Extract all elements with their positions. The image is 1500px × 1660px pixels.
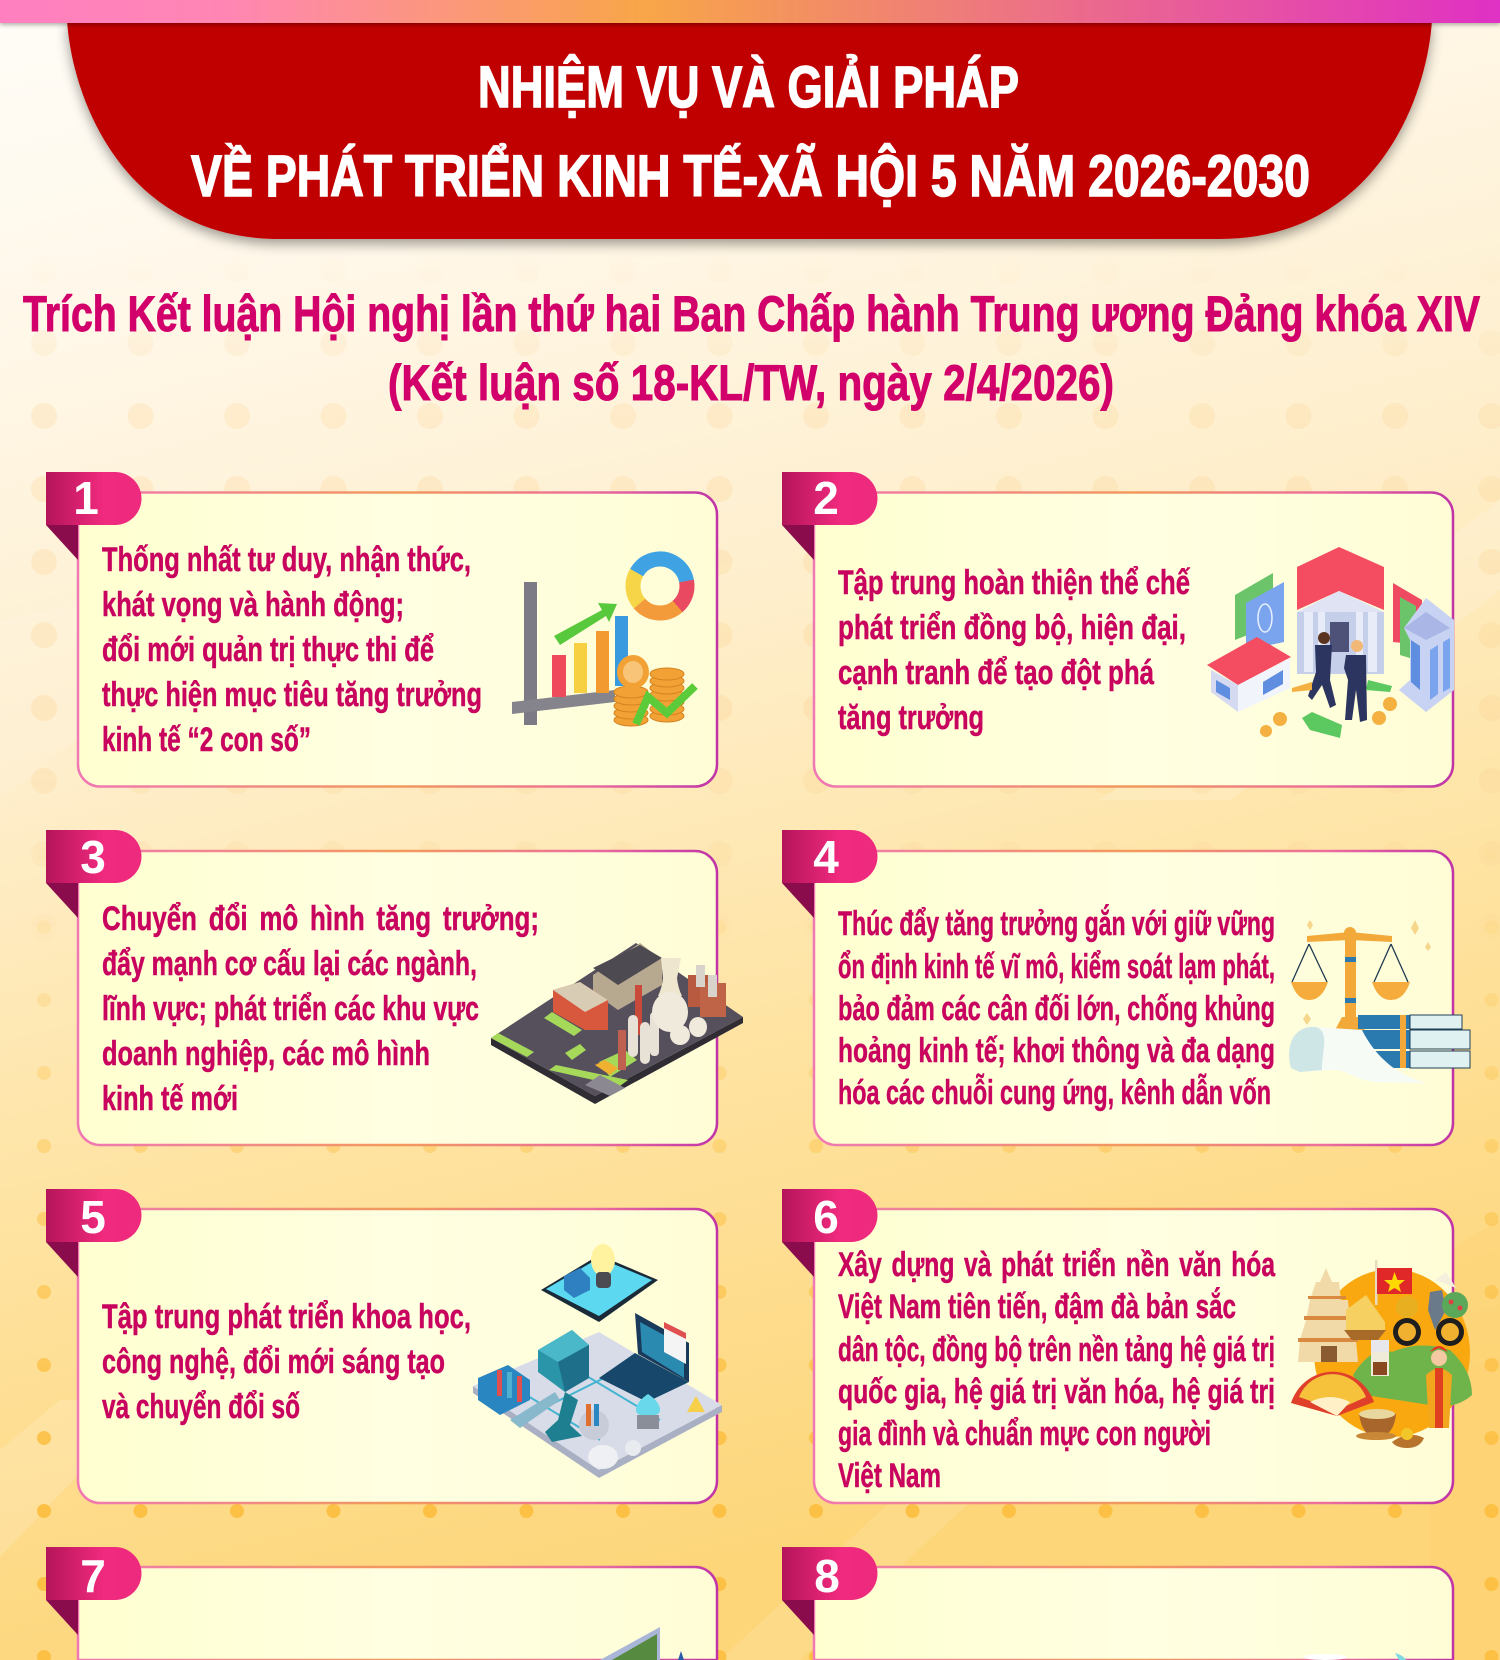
- text: item 2: tăng trưởng: [838, 699, 984, 737]
- text: item 6: dân tộc, đồng bộ trên nền tảng hệ giá trị: [838, 1331, 1275, 1369]
- icon: scales, books and scroll: [1289, 920, 1470, 1083]
- number badge 2: [782, 472, 878, 560]
- icon: growth chart with coins: [512, 548, 698, 726]
- text: item 1: [102, 541, 482, 759]
- icon: science and technology lab: [473, 1244, 722, 1478]
- text: item 3: doanh nghiệp, các mô hình: [102, 1035, 430, 1073]
- text: item 5: [102, 1298, 471, 1426]
- panel: item 6: [782, 1189, 1472, 1503]
- panel: item 8: [782, 1547, 1453, 1660]
- text: item 1: đổi mới quản trị thực thi để: [102, 631, 434, 669]
- number badge 4: 4: [813, 831, 839, 883]
- text: item 5: công nghệ, đổi mới sáng tạo: [102, 1343, 445, 1381]
- text: item 6: Xây dựng và phát triển nền văn hóa: [838, 1246, 1276, 1284]
- text: item 2: phát triển đồng bộ, hiện đại,: [838, 609, 1186, 647]
- icon: blackboard corner: [600, 1627, 684, 1660]
- text: item 1: thực hiện mục tiêu tăng trưởng: [102, 676, 482, 714]
- icon: isometric factory: [491, 943, 743, 1104]
- text: item 3: [102, 900, 539, 1118]
- number badge 7: [46, 1547, 142, 1635]
- text: item 2: cạnh tranh để tạo đột phá: [838, 654, 1154, 692]
- text: item 6: [838, 1246, 1276, 1495]
- icon: bank, house and business handshake: [1207, 547, 1454, 738]
- text: item 1: khát vọng và hành động;: [102, 586, 404, 624]
- number badge 7: 7: [80, 1550, 106, 1602]
- panel: item 3: [46, 830, 743, 1145]
- number badge 1: [46, 472, 142, 560]
- text: item 3: Chuyển đổi mô hình tăng trưởng;: [102, 900, 539, 938]
- number badge 2: 2: [813, 472, 839, 524]
- icon: top of illustration: [1303, 1653, 1406, 1660]
- text: item 3: lĩnh vực; phát triển các khu vực: [102, 990, 479, 1028]
- text: item 6: gia đình và chuẩn mực con người: [838, 1415, 1211, 1453]
- top gradient bar: [0, 0, 1500, 23]
- text: item 4: [838, 905, 1275, 1112]
- text: item 4: bảo đảm các cân đối lớn, chống khủng: [838, 990, 1275, 1028]
- number badge 6: 6: [813, 1191, 839, 1243]
- text: item 6: quốc gia, hệ giá trị văn hóa, hệ giá trị: [838, 1373, 1275, 1411]
- subtitle: [23, 286, 1480, 411]
- subtitle: (Kết luận số 18-KL/TW, ngày 2/4/2026): [388, 355, 1114, 411]
- number badge 3: 3: [80, 831, 106, 883]
- text: item 3: đẩy mạnh cơ cấu lại các ngành,: [102, 945, 477, 983]
- number badge 5: 5: [80, 1191, 106, 1243]
- number badge 4: [782, 830, 878, 918]
- number badge 3: [46, 830, 142, 918]
- text: item 6: Việt Nam: [838, 1457, 941, 1495]
- panel: item 2: [782, 472, 1454, 786]
- text: item 5: và chuyển đổi số: [102, 1388, 300, 1426]
- text: item 4: hoảng kinh tế; khơi thông và đa dạng: [838, 1032, 1275, 1070]
- icon: Vietnamese culture montage: [1291, 1260, 1472, 1448]
- title line 1: NHIỆM VỤ VÀ GIẢI PHÁP: [478, 55, 1019, 120]
- text: item 3: kinh tế mới: [102, 1080, 238, 1118]
- text: item 6: Việt Nam tiên tiến, đậm đà bản sắc: [838, 1288, 1236, 1326]
- text: item 2: Tập trung hoàn thiện thể chế: [838, 564, 1190, 602]
- text: item 4: hóa các chuỗi cung ứng, kênh dẫn vốn: [838, 1074, 1271, 1112]
- number badge 5: [46, 1189, 142, 1277]
- panel: item 7: [46, 1547, 717, 1660]
- number badge 6: [782, 1189, 878, 1277]
- panel: item 1: [46, 472, 717, 786]
- panel: item 4: [782, 830, 1470, 1145]
- text: item 1: Thống nhất tư duy, nhận thức,: [102, 541, 471, 579]
- text: item 2: [838, 564, 1190, 737]
- number badge 8: 8: [814, 1550, 840, 1602]
- text: item 4: Thúc đẩy tăng trưởng gắn với giữ vững: [838, 905, 1275, 943]
- text: item 4: ổn định kinh tế vĩ mô, kiểm soát lạm phát,: [838, 948, 1275, 986]
- number badge 1: 1: [73, 472, 99, 524]
- text: item 5: Tập trung phát triển khoa học,: [102, 1298, 471, 1336]
- title banner: [67, 20, 1432, 239]
- number badge 8: [782, 1547, 878, 1635]
- panel: item 5: [46, 1189, 722, 1503]
- text: item 1: kinh tế “2 con số”: [102, 721, 311, 759]
